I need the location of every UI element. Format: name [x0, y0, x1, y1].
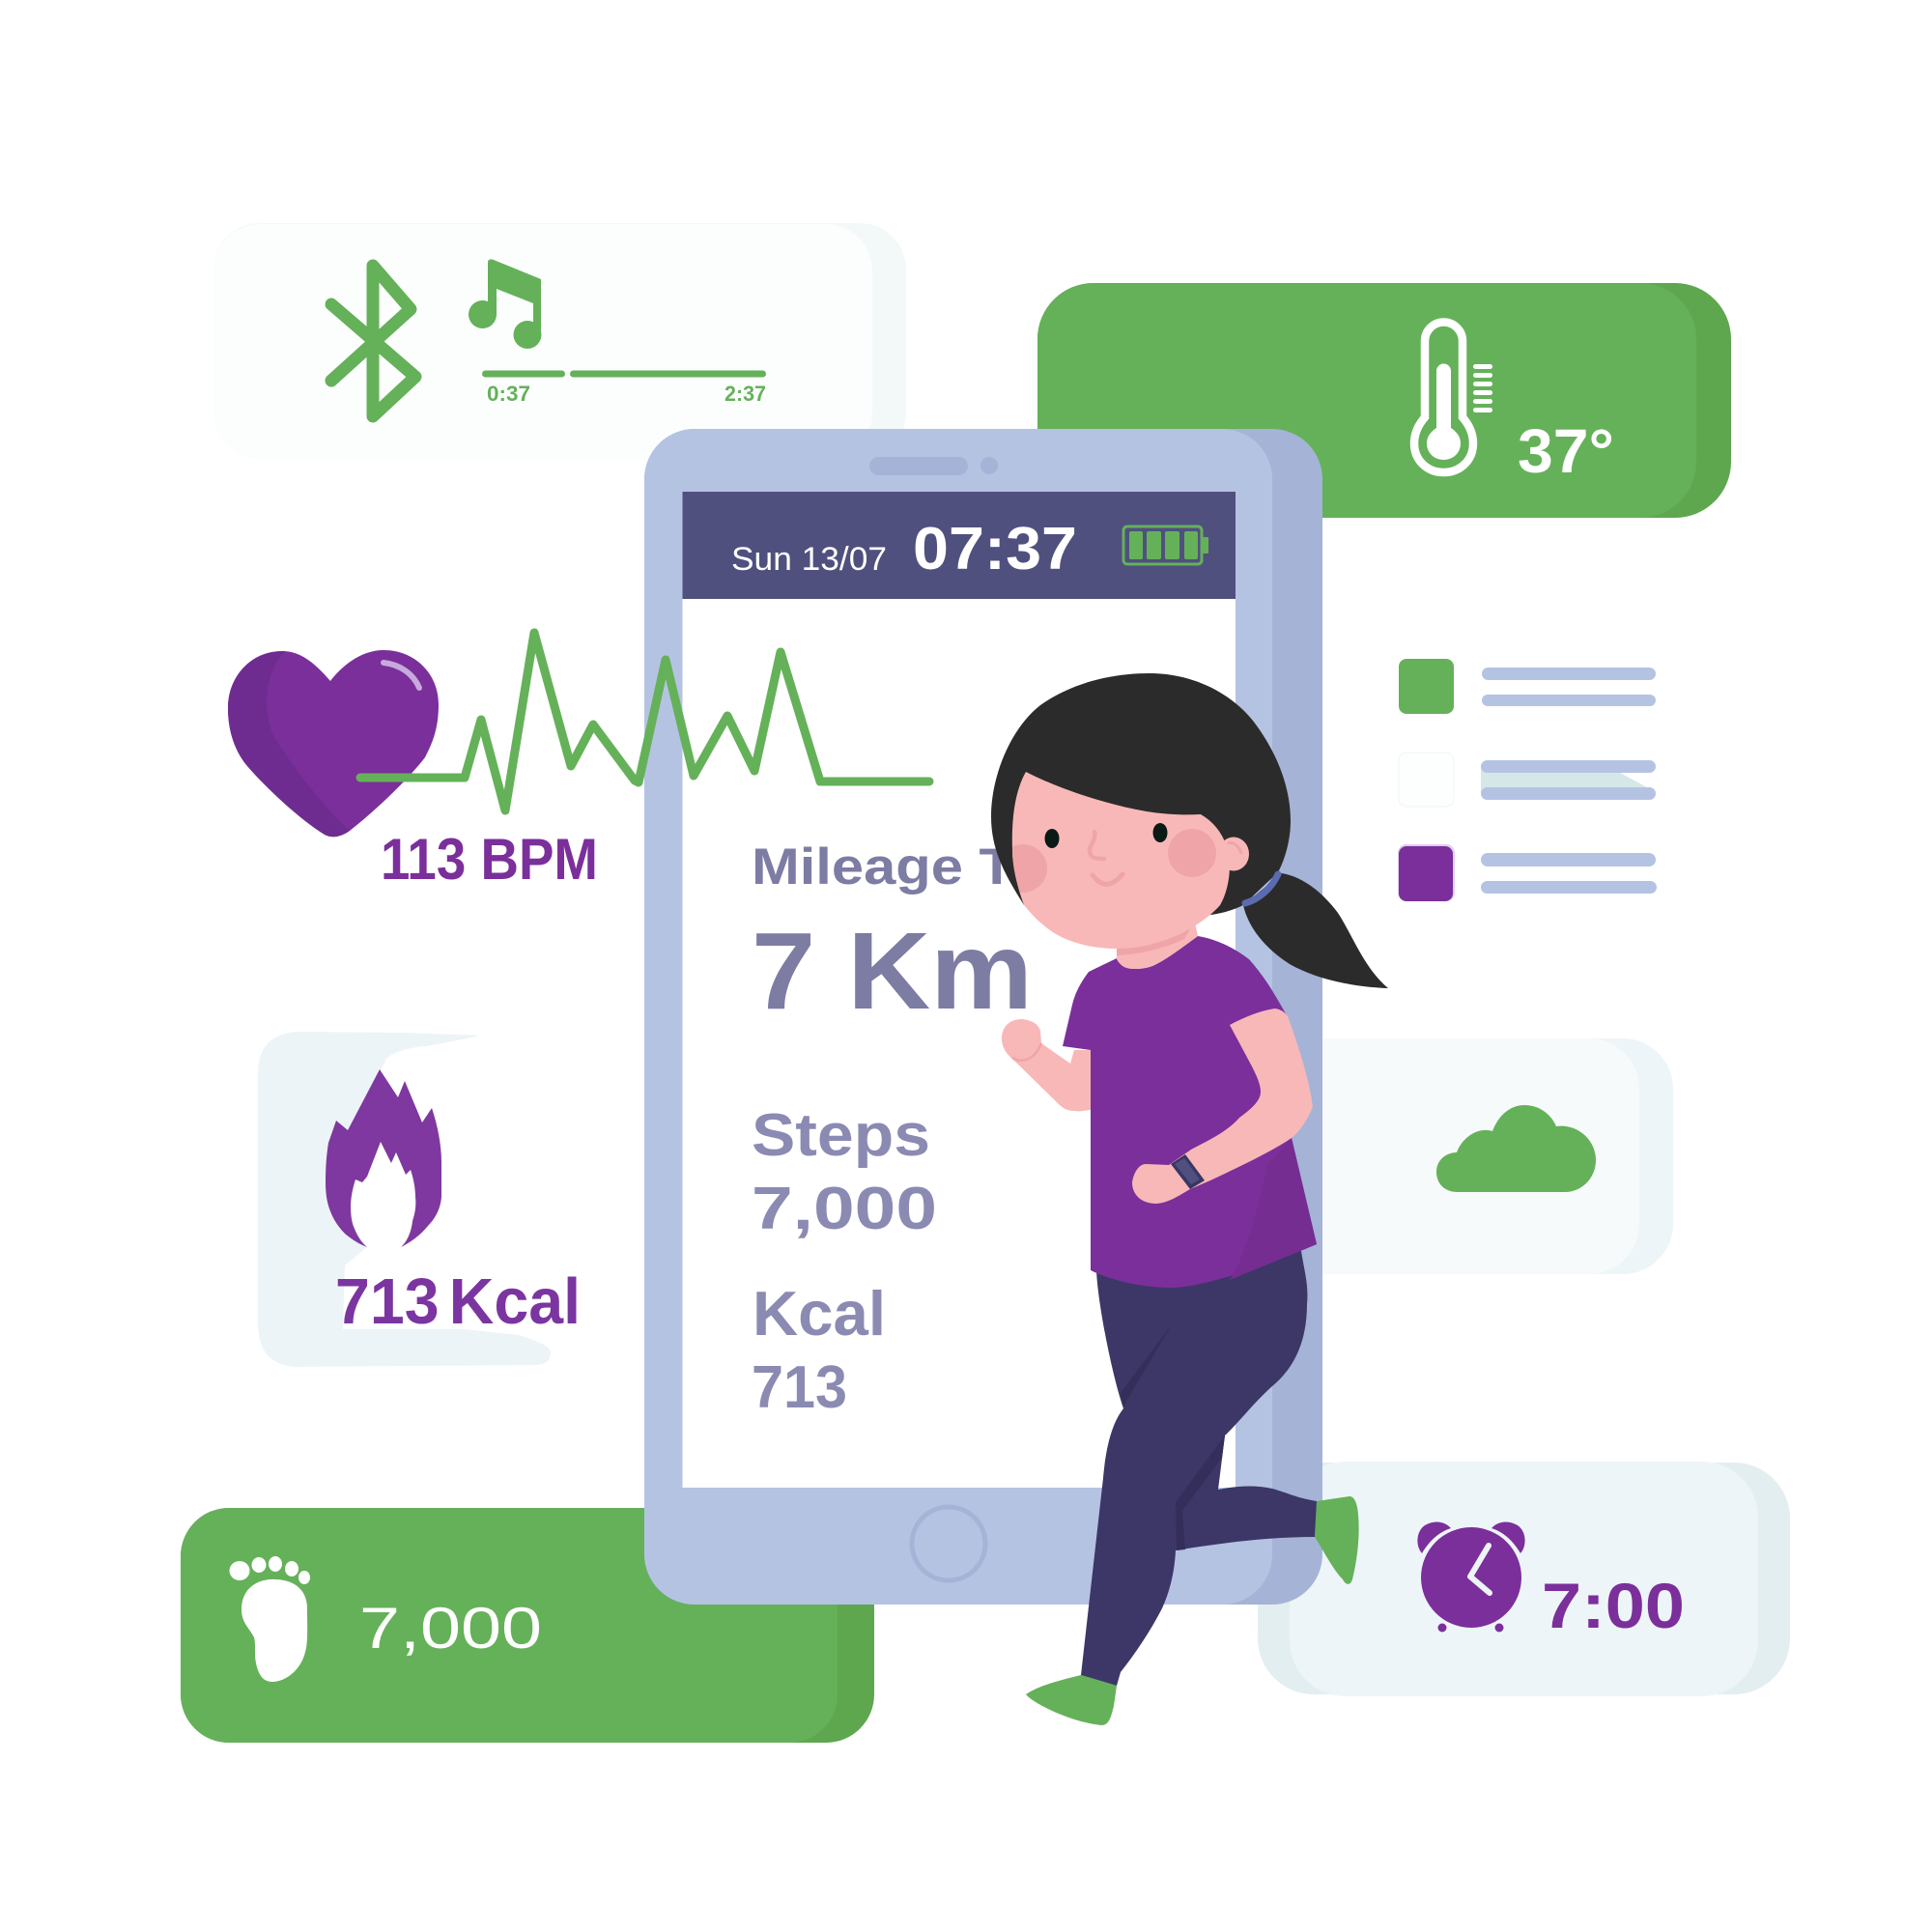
neck shadow [1117, 927, 1191, 955]
icon: battery [1123, 526, 1208, 564]
eyes [1045, 823, 1167, 848]
phone [644, 429, 1322, 1605]
label: elapsed time: 0:37 [487, 382, 530, 406]
icon: bluetooth [331, 266, 415, 416]
legend swatch: white [1399, 753, 1454, 807]
mileage value: 7 Km [752, 910, 1033, 1032]
legend lines: third row [1481, 853, 1657, 894]
phone screen [682, 492, 1236, 1488]
nose [1090, 832, 1104, 859]
temperature value: 37° [1518, 416, 1614, 486]
pants [1081, 1251, 1317, 1686]
pants fold: knee [1176, 1435, 1225, 1550]
hair tie [1245, 874, 1278, 903]
legend lines: second row [1481, 760, 1656, 800]
alarm time: 7:00 [1542, 1570, 1685, 1641]
steps heading: Steps [752, 1102, 930, 1169]
panel: cloud sync [1256, 1038, 1673, 1274]
list legend [1398, 659, 1657, 901]
t-shirt [1063, 936, 1317, 1288]
t-shirt shade [1230, 1138, 1317, 1280]
mileage heading: Mileage T [752, 838, 1014, 895]
pants fold: thigh [1121, 1324, 1172, 1406]
heart rate value: 113 BPM [381, 827, 598, 892]
clock time: 07:37 [913, 516, 1077, 582]
near arm [1132, 1009, 1313, 1204]
phone home button [912, 1507, 985, 1580]
neck [1117, 923, 1198, 969]
fitness wristband [1171, 1154, 1205, 1189]
panel: temperature [1037, 283, 1731, 518]
icon: music note [469, 259, 541, 349]
phone speaker [869, 457, 968, 475]
panel: bluetooth and music [213, 223, 906, 459]
panel: steps [181, 1508, 874, 1743]
legend swatch: green [1399, 659, 1454, 714]
kcal heading: Kcal [753, 1278, 886, 1349]
steps value: 7,000 [752, 1176, 937, 1242]
progress bar: remaining [570, 371, 766, 377]
phone status bar [682, 492, 1236, 599]
shoes [1026, 1496, 1359, 1725]
icon: heart [228, 650, 439, 837]
label: total time: 2:37 [724, 382, 766, 406]
icon: alarm clock [1417, 1521, 1525, 1633]
phone camera [980, 457, 998, 474]
kcal value: 713 [752, 1354, 847, 1421]
hair [991, 673, 1291, 915]
face [999, 772, 1249, 949]
icon: footprint [230, 1556, 310, 1682]
ECG pulse line [360, 633, 929, 810]
icon: cloud [1436, 1105, 1596, 1192]
ponytail [1243, 873, 1388, 988]
cheeks [999, 829, 1216, 893]
infographic canvas [181, 223, 1790, 1743]
far arm [1002, 1019, 1096, 1111]
panel: calories [258, 1032, 581, 1367]
date: Sun 13/07 [731, 541, 887, 578]
ear [1218, 837, 1249, 871]
icon: thermometer [1414, 323, 1492, 472]
panel: alarm clock [1258, 1462, 1790, 1696]
fist crease [1012, 1043, 1041, 1061]
panel: heart rate [228, 633, 929, 892]
mouth [1093, 874, 1122, 884]
character: running woman [991, 673, 1388, 1725]
calorie value: 713 Kcal [335, 1265, 581, 1338]
progress bar: elapsed [482, 371, 565, 377]
legend lines: first row [1482, 668, 1656, 706]
legend swatch: purple [1398, 844, 1455, 901]
step count: 7,000 [359, 1596, 542, 1661]
icon: flame [326, 1069, 441, 1247]
